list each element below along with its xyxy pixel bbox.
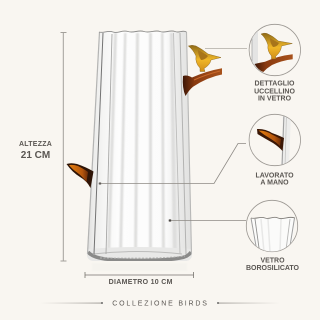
detail circle: hand made — [249, 113, 300, 167]
right glass branch — [183, 68, 222, 96]
leader: bird detail — [205, 48, 247, 50]
label — [254, 81, 295, 103]
footer right rule — [217, 302, 280, 304]
height label — [19, 141, 52, 161]
callout: vetro borosilicato — [246, 200, 300, 272]
label: UCCELLINO — [254, 88, 295, 95]
vase flutes — [87, 33, 192, 262]
diameter label: DIAMETRO 10 CM — [109, 279, 173, 286]
detail circle: bird — [249, 20, 300, 80]
leader: lavorato a mano — [99, 144, 246, 184]
vase — [87, 31, 192, 271]
label: A MANO — [260, 180, 289, 187]
diameter dimension line — [85, 272, 194, 278]
vase body — [87, 32, 192, 261]
glass bird — [188, 45, 221, 72]
footer left rule — [40, 302, 103, 304]
callout: dettaglio uccellino in vetro — [249, 20, 300, 103]
height dimension line — [60, 32, 66, 261]
footer title: COLLEZIONE BIRDS — [112, 300, 209, 308]
height label: ALTEZZA — [19, 141, 52, 148]
vase outlines — [88, 31, 192, 254]
leader: vetro borosilicato — [169, 219, 246, 222]
label: IN VETRO — [258, 96, 292, 103]
label — [246, 258, 300, 272]
label: DETTAGLIO — [255, 81, 295, 88]
label — [255, 172, 294, 187]
vase base — [87, 247, 192, 262]
left glass branch — [66, 163, 94, 188]
callout: lavorato a mano — [249, 113, 300, 187]
label: VETRO — [260, 258, 285, 265]
label: LAVORATO — [255, 172, 294, 180]
label: BOROSILICATO — [246, 265, 300, 272]
detail circle: glass — [246, 200, 298, 255]
vase reflection — [92, 263, 187, 271]
height label: 21 CM — [21, 150, 50, 161]
